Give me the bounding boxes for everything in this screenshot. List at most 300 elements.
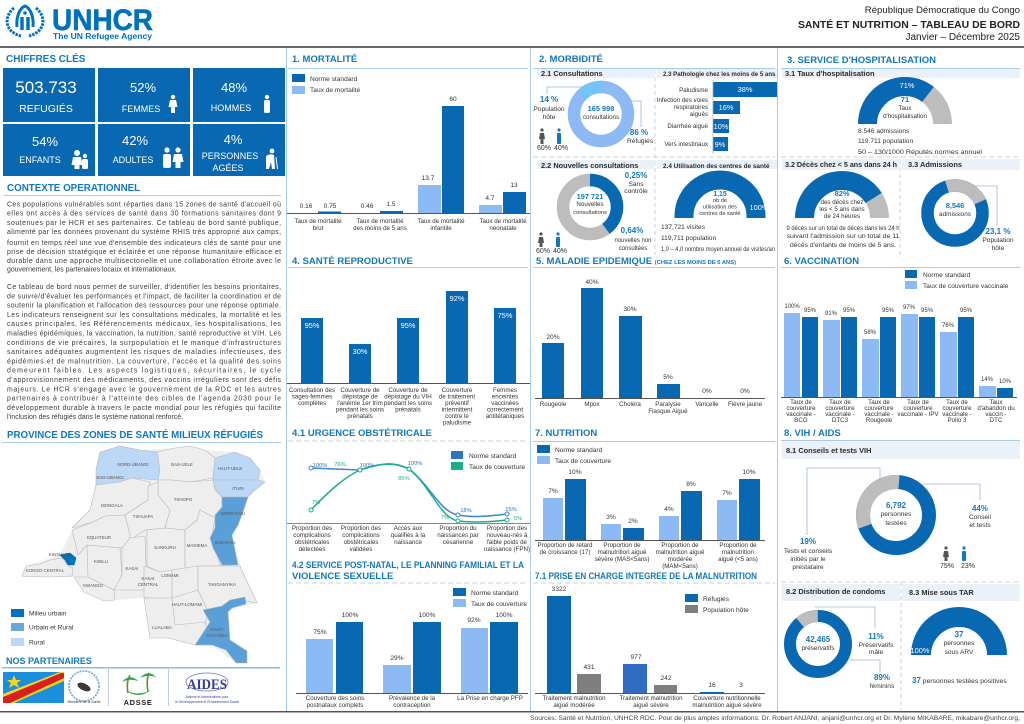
callout: préservatifs: 11%	[868, 632, 884, 641]
legend: Taux de couverture	[469, 464, 525, 471]
report title: SANTÉ ET NUTRITION – TABLEAU DE BORD	[798, 18, 1020, 31]
province labels: HAUT-	[210, 627, 224, 632]
panel: 4. santé reproductive	[287, 256, 530, 426]
province labels: KASAI	[142, 576, 154, 581]
bar chart: Taux	[989, 399, 1003, 406]
bar chart: 10%	[999, 379, 1012, 385]
donut chart: préservatifs	[801, 645, 835, 652]
2.3 pathologie: aiguës	[690, 111, 708, 118]
donut chart: 42,465	[806, 635, 831, 644]
KPI: personnes âgées: 4%	[224, 132, 243, 147]
bar chart: Consultation des	[289, 387, 335, 394]
bar chart: postnataux complets	[307, 702, 363, 709]
bar chart: préventif	[445, 400, 469, 407]
paragraph 1: soutenues par le HCR et ses partenaires. Ce tableau de bord santé publique,	[7, 220, 281, 227]
bar chart: Rougeole	[866, 417, 893, 424]
line chart: 85%	[398, 476, 410, 482]
heading: 4.1 URGENCE OBSTÉTRICALE	[292, 428, 432, 439]
bar chart: prénatals	[347, 413, 373, 420]
bar chart: 30%	[623, 306, 637, 313]
line chart: Proportion des	[341, 525, 381, 532]
gauge chart: 82%	[835, 189, 850, 198]
KPI: adultes: 42%	[122, 133, 148, 148]
gauge chart: sous ARV	[945, 649, 974, 656]
heading: 4. SANTÉ REPRODUCTIVE	[292, 256, 413, 267]
legend: Taux de couverture	[555, 458, 611, 465]
legend: Norme standard	[555, 447, 603, 454]
bar chart: Prévalence de la	[389, 695, 436, 702]
line chart: 100%	[360, 463, 374, 469]
legend	[685, 594, 749, 614]
heading: 6. VACCINATION	[784, 256, 859, 267]
gauge chart: 100%	[750, 203, 769, 212]
paragraph 2: majeurs. Le HCR s'engage avec le gouvernement de la RDC et les autres	[7, 386, 282, 393]
bar chart: aiguë (<5 ans)	[718, 556, 758, 563]
callout: prestataire: initiés par le	[790, 556, 826, 563]
province labels: KASAI	[126, 566, 138, 571]
bar chart: 3%	[606, 514, 616, 521]
callout: conseil et tests: et tests	[969, 522, 991, 529]
line chart: obstétricales	[344, 539, 378, 546]
callout: réfugiés: 86 %	[630, 128, 648, 137]
2.4 utilisation des centres de santé	[657, 160, 777, 253]
bar chart: 10%	[568, 469, 582, 476]
bar chart: Couverture nutritionnelle	[693, 695, 761, 702]
legend: Population hôte	[703, 607, 749, 614]
bar chart: 5%	[663, 374, 673, 381]
KPI: personnes âgées: AGÉES	[212, 163, 244, 173]
callout: réfugiés: Réfugiés	[627, 138, 654, 145]
line chart: Accès aux	[394, 525, 423, 532]
callout: féminins: féminins	[870, 683, 895, 690]
callout: prestataire	[784, 537, 833, 571]
province labels: EQUATEUR	[87, 535, 111, 540]
bar chart: vaccin -	[985, 411, 1007, 418]
bar chart: 242	[660, 675, 672, 682]
bar chart: intermittent	[442, 406, 473, 414]
province labels: TANGANYIKA	[208, 582, 236, 587]
panel: chiffres clés	[3, 52, 285, 176]
callout: population hôte: 14 %	[540, 95, 558, 104]
bar chart: dépistage du VIH	[384, 394, 432, 400]
paragraph 2: épidémies et de malnutrition. La couverture, l'accès et la qualité des soins	[7, 358, 282, 365]
callout: nouvelles: 0,64%	[621, 226, 643, 235]
bar chart: sévère (MAS<5ans)	[595, 556, 649, 563]
paragraph 2: soutenir la planification et l'allocation des ressources pour une réponse optimale.	[7, 303, 281, 310]
line chart: obstétricales	[295, 539, 329, 546]
province labels: NORD-KIVU	[221, 511, 245, 516]
gauge chart: les < 5 ans dans	[819, 206, 865, 213]
line chart: 7%	[441, 515, 449, 521]
bar chart: 92%	[467, 617, 481, 624]
KPI: enfants	[3, 124, 95, 176]
logo: AIDES	[175, 673, 239, 704]
bar chart: 4%	[664, 506, 674, 513]
province labels: NORD-UBANGI	[117, 462, 149, 467]
3.2 décès: 9 décès sur un total de décès dans les 24 h	[786, 225, 900, 232]
bar chart: malnutrition aiguë	[598, 549, 647, 556]
3.3 admissions	[902, 159, 1020, 252]
logo: ADSSE: ADSSE	[124, 698, 152, 707]
line chart: détectées	[299, 546, 325, 553]
UNHCR logo	[7, 4, 153, 41]
header	[0, 4, 1024, 48]
bar chart: de traitement	[439, 394, 475, 400]
heading: 7. NUTRITION	[535, 428, 597, 439]
bar chart: vaccinale -	[786, 411, 816, 418]
gauge chart: 71%	[900, 81, 915, 90]
3.2 décès: suivant l'admission sur un total de 11	[786, 233, 900, 240]
KPI: hommes: HOMMES	[211, 103, 251, 113]
callout: préservatifs	[859, 632, 894, 656]
8.2 distribution de condoms: 8.2 Distribution de condoms	[786, 587, 885, 596]
bar chart: 75%	[498, 311, 513, 320]
gauge chart	[911, 617, 997, 693]
donut chart: 165 998	[588, 104, 614, 113]
bar chart: 60	[449, 96, 457, 103]
gauge chart: 71	[901, 95, 909, 104]
heading: CHIFFRES CLÉS	[6, 52, 86, 65]
gauge chart: centres de santé	[699, 211, 741, 217]
bar chart: brut	[313, 225, 324, 232]
gauge chart: Taux	[898, 105, 912, 112]
donut chart	[854, 473, 938, 557]
legend	[537, 445, 611, 465]
donut chart: 6,792	[886, 501, 907, 510]
KPI: enfants: 54%	[32, 134, 58, 149]
legend	[905, 270, 1009, 290]
bar chart: 1.5	[386, 201, 396, 208]
donut chart	[921, 179, 989, 247]
province labels: LOMAMI	[161, 573, 179, 578]
bar chart: vaccinale -	[864, 411, 894, 418]
KPI: enfants: ENFANTS	[19, 155, 61, 165]
line chart: naissances par	[437, 532, 479, 539]
bar chart: Paralysie	[655, 401, 681, 408]
bar chart: 7%	[548, 488, 558, 495]
callout: féminins	[870, 673, 895, 690]
gender split: 60%	[536, 248, 550, 255]
callout: nouvelles: nouvelles non	[614, 238, 652, 244]
line chart: faible poids de	[487, 539, 528, 546]
8.1 conseils et tests VIH	[782, 441, 1020, 571]
line chart: 7%	[312, 500, 320, 506]
logo: ministry seal: Ministère de la Santé	[68, 700, 100, 704]
footer: Sources: Santé et Nutrition, UNHCR RDC. Pour de plus amples informations: Dr. Robert ANJANI, anjani@unhcr.org et Dr. Mylène MIKABARE, mikabare@unhcr.org,	[530, 715, 1020, 722]
province labels: BAS-UELE	[171, 462, 193, 467]
bar chart: 4.7	[485, 195, 495, 202]
donut chart: admissions	[939, 211, 971, 218]
callout: population hôte: hôte	[992, 245, 1005, 252]
bar chart: 30%	[353, 347, 368, 356]
bar chart: Couverture	[442, 387, 473, 394]
line chart: naissance	[394, 539, 422, 546]
paragraph 2: Ce tableau de bord nous permet de surveiller, d'identifier les besoins prioritaires,	[7, 284, 281, 291]
callout: population hôte	[982, 227, 1014, 252]
2.4 utilisation des centres de santé: 2.4 Utilisation des centres de santé	[663, 163, 770, 170]
callout: sans	[624, 171, 648, 195]
line chart: 18%	[460, 508, 472, 514]
panel: 1. mortalité	[287, 54, 530, 232]
bar chart: (MAM<5ans)	[662, 563, 698, 570]
bar chart: Proportion de	[661, 542, 699, 549]
paragraph 1: elles ont accès à des services de santé dans 30 formations sanitaires dont 9	[7, 211, 281, 218]
heading: NOS PARTENAIRES	[6, 656, 92, 666]
panel: carte des provinces	[2, 428, 281, 663]
bar chart: Traitement malnutrition	[542, 695, 606, 702]
donut chart: consultations	[583, 114, 619, 121]
map legend: Urbain et Rural	[29, 624, 74, 632]
callout: conseil et tests: 44%	[972, 504, 988, 513]
bar chart: 0%	[740, 388, 750, 395]
donut chart: Nouvelles	[576, 201, 604, 208]
bar chart: Couverture de	[388, 387, 428, 394]
donut chart: 8,546	[946, 201, 964, 210]
bar chart: aiguë modérée	[553, 702, 595, 709]
province labels: MANIEMA	[187, 543, 207, 548]
province labels: SANKURU	[154, 545, 176, 550]
bar chart: Femmes	[493, 387, 517, 394]
callout: nouvelles: consultées	[619, 246, 647, 252]
heading: 5. MALADIE EPIDEMIQUE (CHEZ LES MOINS DE 5 ANS)	[536, 256, 736, 267]
bar chart: 3	[739, 682, 743, 689]
panel: 8. VIH / AIDS	[779, 428, 1020, 710]
bar chart	[535, 469, 765, 570]
province labels: LUALABA	[152, 625, 172, 630]
bar chart: contraception	[393, 702, 431, 709]
callout: prestataire: 19%	[800, 537, 816, 546]
paragraph 2: l'inclusion des réfugiés dans le système national renforcé.	[7, 414, 183, 421]
bar chart: paludisme	[443, 420, 472, 426]
bar chart: 91%	[825, 311, 838, 317]
KPI: personnes âgées	[193, 124, 285, 176]
bar chart: d'abandon du	[977, 405, 1015, 412]
gender split: 60%	[537, 145, 551, 152]
bar chart: 10%	[742, 469, 756, 476]
column borders	[286, 48, 778, 711]
gauge chart	[804, 180, 880, 256]
map of DRC	[22, 446, 265, 663]
province labels: TSHOPO	[174, 497, 193, 502]
callout: prestataire: prestataire	[792, 564, 824, 571]
bar chart	[287, 96, 530, 232]
heading: PROVINCE DES ZONES DE SANTÉ MILIEUX RÉFUGIÉS	[7, 428, 263, 441]
gender split	[940, 546, 975, 570]
paragraph 2: conditions de vie précaires, la surpopulation et le manque d'infrastructures	[7, 340, 282, 347]
paragraph 1	[7, 202, 281, 274]
logo: ADSSE	[122, 673, 156, 707]
panel: partenaires	[2, 656, 280, 707]
bar chart: 95%	[882, 308, 895, 314]
bar chart: Varicelle	[695, 401, 719, 408]
bar chart: Couverture des soins	[306, 695, 364, 702]
KPI: réfugiés	[3, 68, 95, 122]
2.3 pathologie: Paludisme	[679, 87, 709, 94]
bar chart: pendant les soins	[336, 406, 384, 414]
bar chart: couverture	[825, 405, 855, 412]
bar chart: 431	[583, 664, 595, 671]
bar chart: des moins de 5 ans	[353, 225, 407, 232]
paragraph 2: de suivre/d'évaluer les performances et l'impact, de faciliter la coordination et de	[7, 293, 281, 300]
donut chart: consultations	[573, 210, 607, 216]
bar chart: 76%	[942, 323, 955, 329]
heading: CONTEXTE OPERATIONNEL	[7, 183, 140, 194]
callout: sans: Sans	[628, 181, 644, 188]
paragraph 2: demeurent faibles. Les aspects logistiques, sécuritaires, le cycle	[7, 368, 281, 375]
legend: Norme standard	[310, 76, 358, 83]
legend: Réfugiés	[703, 596, 730, 603]
bar chart: vaccinale - IPV	[897, 411, 939, 418]
gender split: 75%	[940, 563, 954, 570]
3.3 admissions: 3.3 Admissions	[908, 160, 962, 169]
gauge chart: d'hospitalisation	[883, 113, 927, 120]
line chart: Proportion des	[487, 525, 527, 532]
2.4 utilisation des centres de santé: 1,0 – 4,0 nombre moyen annuel de visites/an	[661, 246, 775, 253]
bar chart: 95%	[401, 321, 416, 330]
bar chart: 40%	[585, 279, 599, 286]
paragraph 2: causes principales, les Référencements médicaux, les hospitalisations, les	[7, 321, 282, 328]
line chart: Proportion des	[292, 525, 332, 532]
2.2 nouvelles consultations: 2.2 Nouvelles consultations	[541, 161, 638, 170]
bar chart: 8%	[686, 481, 696, 488]
paragraph 1: durable dans une approche multisectorielle et une collaboration étroite avec le	[7, 258, 281, 265]
2.3 pathologie: respiratoires	[674, 104, 708, 111]
bar chart: malnutrition aiguë sévère	[692, 702, 762, 709]
province labels: CENTRAL	[138, 582, 159, 587]
bar chart: 16	[708, 682, 716, 689]
line chart: complications	[342, 532, 380, 539]
bar chart	[296, 612, 528, 709]
province labels	[26, 462, 245, 638]
3.2 décès: 3.2 Décès chez < 5 ans dans 24 h	[785, 162, 897, 169]
callout: nouvelles	[614, 226, 652, 252]
callout: prestataire: Tests et conseils	[784, 548, 833, 555]
bar chart: 2%	[628, 518, 638, 525]
bar chart: 7%	[722, 490, 732, 497]
logo: AIDES: AIDES	[187, 677, 227, 693]
bar chart: 0.16	[300, 203, 313, 210]
8.3 mise sous TAR: 37 personnes testées positives	[912, 676, 1007, 685]
paragraph 1: gouvernement, les partenaires locaux et internationaux.	[7, 266, 177, 274]
bar chart: Couverture de	[340, 387, 380, 394]
2.4 utilisation des centres de santé: 119,711 population	[661, 235, 716, 242]
bar chart: pendant les soins	[384, 400, 432, 407]
donut chart: testées	[885, 520, 907, 527]
heading: 3. SERVICE D'HOSPITALISATION	[787, 55, 936, 66]
report title	[798, 5, 1020, 43]
8.3 mise sous TAR: 8.3 Mise sous TAR	[909, 588, 974, 597]
bar chart: vaccinées	[491, 400, 519, 407]
report title: République Démocratique du Congo	[865, 5, 1020, 16]
logo: AIDES: Actions et Interventions pour	[186, 695, 229, 699]
paragraph 2: partenaires à contribuer à l'atteinte des cibles de l'agenda 2030 pour le	[7, 396, 281, 403]
callout: conseil et tests	[969, 504, 992, 529]
legend: Taux de mortalité	[310, 87, 361, 94]
panel: contexte opérationnel	[4, 183, 282, 421]
KPI: réfugiés: REFUGIÉS	[19, 102, 73, 115]
province labels: TSHUAPA	[133, 514, 153, 519]
province labels: KATANGA	[207, 633, 227, 638]
gauge chart: 37	[955, 630, 964, 639]
gauge chart: personnes	[944, 640, 975, 647]
legend: Norme standard	[923, 272, 971, 279]
callout: population hôte: 23,1 %	[986, 227, 1010, 236]
KPI: femmes: 52%	[130, 80, 156, 95]
bar chart: sages-femmes	[292, 394, 332, 400]
bar chart: Rougeole	[540, 401, 567, 408]
bar chart: 977	[630, 654, 642, 661]
2.3 pathologie: 38%	[738, 85, 753, 94]
gauge chart: 1,15	[713, 191, 727, 198]
bar chart: Choléra	[619, 401, 641, 408]
bar chart: DTC	[990, 417, 1003, 424]
gauge chart: 100%	[911, 646, 930, 655]
line chart: validées	[350, 546, 372, 553]
2.1 consultations: 2.1 Consultations	[541, 69, 603, 78]
bar chart: 100%	[784, 304, 800, 310]
province labels: KINSHASA	[49, 552, 71, 557]
bar chart: 29%	[390, 655, 404, 662]
KPI: adultes	[98, 124, 190, 176]
8.3 mise sous TAR	[902, 584, 1020, 693]
bar chart: couverture	[786, 405, 816, 412]
province labels: KWILU	[94, 559, 108, 564]
2.3 pathologie	[657, 69, 777, 154]
legend: Norme standard	[469, 453, 517, 460]
2.4 utilisation des centres de santé: 137,721 visites	[661, 224, 706, 231]
bar chart: enceintes	[492, 394, 518, 400]
province labels: HAUT-LOMAMI	[172, 602, 202, 607]
logo: ministry seal	[68, 671, 100, 704]
panel: 4.1 urgence obstétricale	[287, 428, 530, 553]
panel: 5. maladie épidémique	[533, 256, 775, 415]
bar chart: de croissance (17)	[540, 549, 590, 556]
panel: 3. service d'hospitalisation	[781, 55, 1020, 258]
bar chart: Fièvre jaune	[728, 401, 763, 408]
panel: 7.1 prise en charge	[533, 571, 775, 709]
bar chart: 95%	[305, 321, 320, 330]
bar chart: Taux de	[790, 399, 812, 406]
callout: préservatifs: Préservatifs	[859, 642, 894, 649]
8.1 conseils et tests VIH: 8.1 Conseils et tests VIH	[786, 446, 871, 455]
bar chart: Taux de mortalité	[417, 218, 465, 225]
bar chart	[535, 586, 765, 709]
3.1 taux d'hospitalisation: 3.1 Taux d'hospitalisation	[785, 69, 875, 78]
bar chart: néonatale	[489, 225, 517, 232]
bar chart: 0%	[702, 388, 712, 395]
bar chart: Taux de mortalité	[294, 218, 342, 225]
UNHCR logo: The UN Refugee Agency	[53, 31, 152, 41]
heading	[292, 560, 524, 582]
icon: wreath and people	[7, 6, 43, 36]
callout: sans: contrôle	[624, 188, 648, 195]
bar chart: Taux de	[946, 399, 968, 406]
callout: population hôte: hôte	[543, 114, 556, 121]
line chart: naissance (FPN)	[484, 546, 530, 553]
bar chart: Flasque Aiguë	[648, 408, 688, 415]
gauge chart: nb de	[713, 198, 727, 204]
bar chart: Taux de mortalité	[479, 218, 527, 225]
bar chart: 100%	[496, 612, 513, 619]
bar chart: Traitement malnutrition	[619, 695, 683, 702]
gauge chart	[868, 81, 942, 162]
3.2 décès	[782, 159, 900, 256]
callout: réfugiés	[627, 128, 654, 145]
gauge chart: de 24 heures	[824, 213, 860, 220]
logo: DRC flag	[3, 672, 64, 703]
logo: AIDES: le Développement et l'Encadrement Social	[175, 700, 239, 704]
heading: 8. VIH / AIDS	[784, 428, 841, 439]
